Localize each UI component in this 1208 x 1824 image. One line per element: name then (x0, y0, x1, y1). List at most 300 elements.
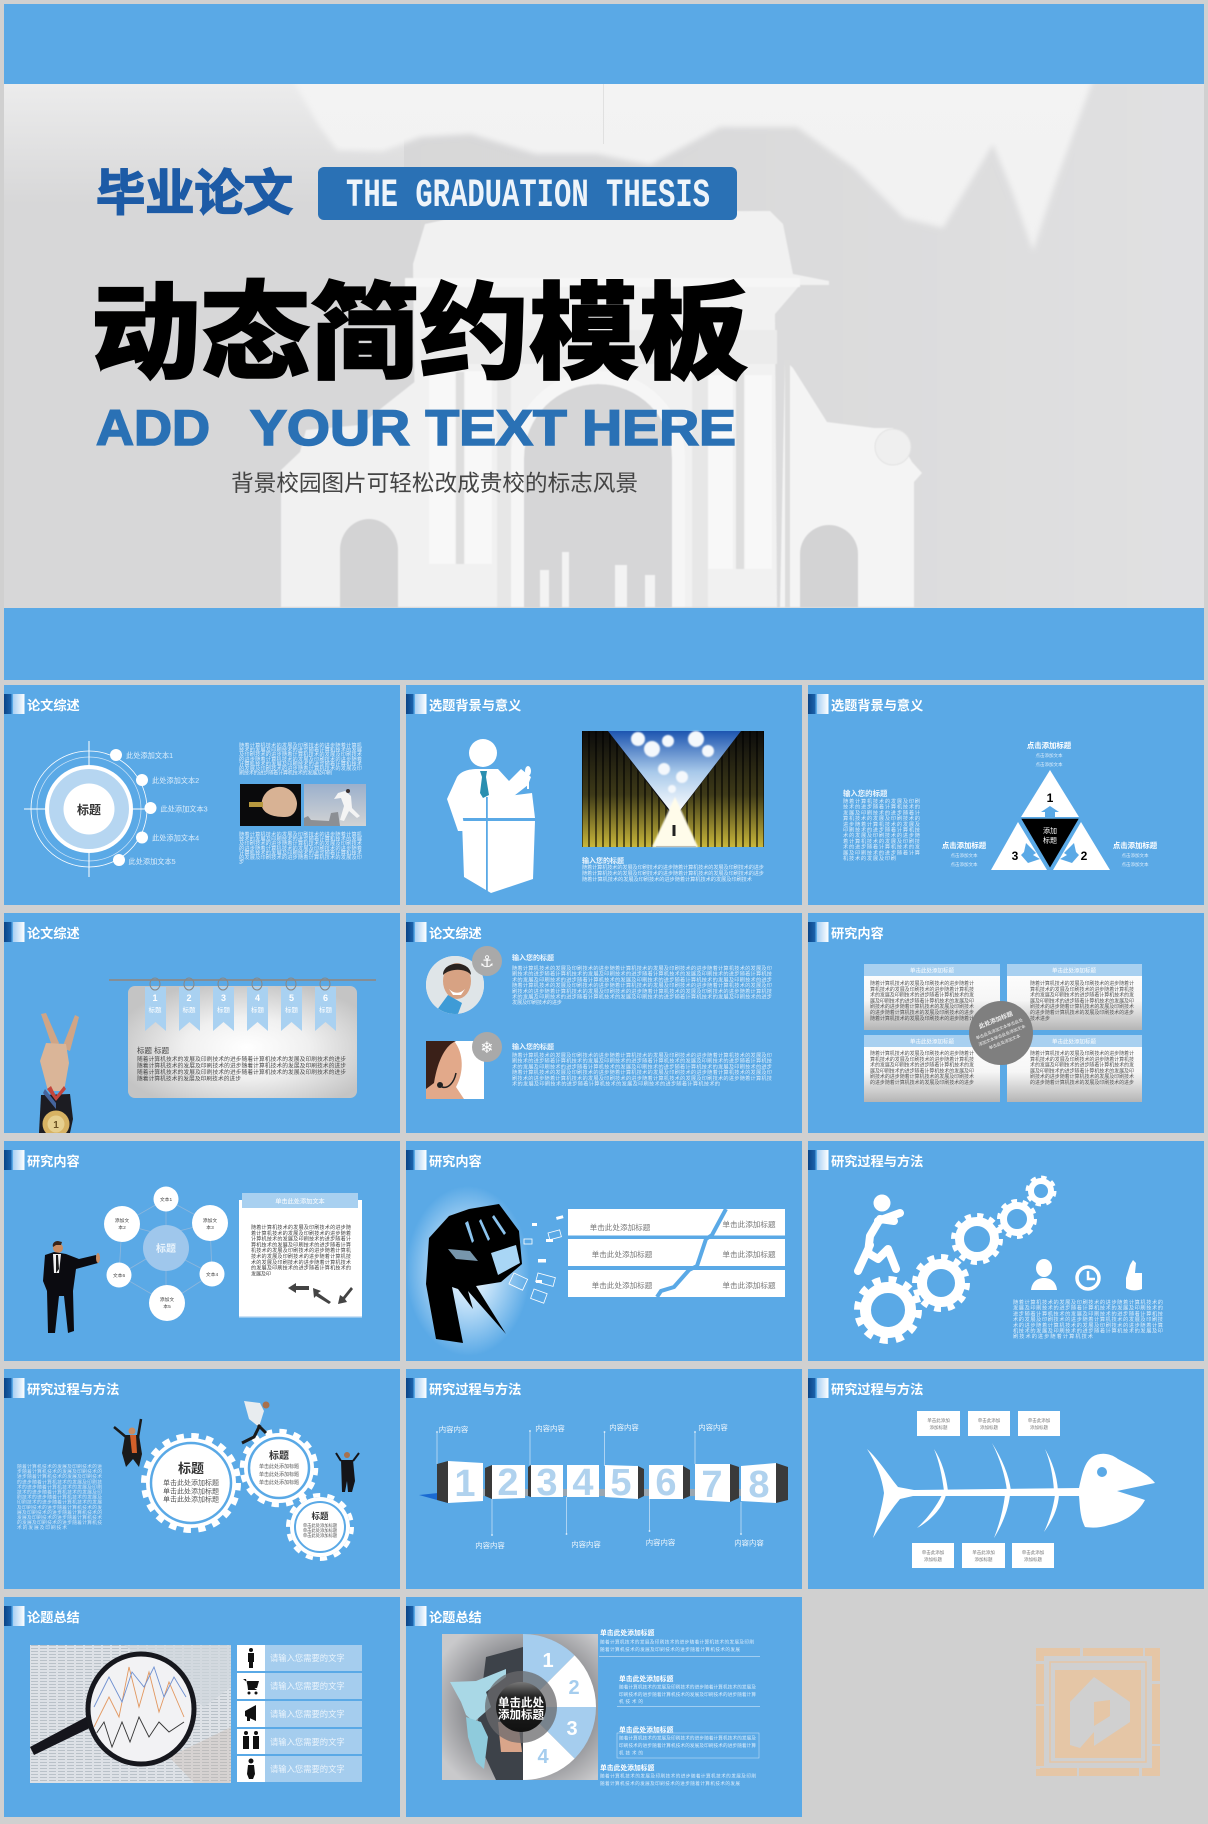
text block left: 进步随着计算机技术的发展及印刷技术 (17, 1473, 102, 1480)
text block left: 步随着计算机技术的发展及印刷技术的 (17, 1468, 102, 1475)
triangle labels: 点击添加文本 (950, 852, 978, 859)
text block left: 术的进步随着计算机技术的发展及印刷 (17, 1483, 102, 1490)
panel: slide 10 研究过程与方法 (4, 1369, 400, 1589)
number wheel: 3 (566, 1718, 578, 1740)
four quadrant cards: 展及印刷技术的进步随着计算机技术的发展及印 (870, 1067, 974, 1074)
panel: slide 14 论题总结 (406, 1597, 802, 1817)
leader lines and labels: 内容内容 (646, 1538, 676, 1547)
hub and spoke diagram: 文本1 (160, 1196, 172, 1203)
top label boxes (917, 1411, 1060, 1436)
bottom label boxes: 添加标题 (974, 1556, 993, 1563)
text block left: 的进步随着计算机技术的发展及印刷技 (17, 1478, 102, 1485)
triangle diagram (991, 770, 1110, 870)
hanging card with ribbons: 5 (289, 993, 294, 1003)
text block 3 (617, 1725, 759, 1758)
top label boxes: 添加标题 (1030, 1424, 1048, 1431)
four quadrant cards: 算机技术的发展及印刷技术的进步随着计算机技 (1030, 986, 1134, 993)
text card with arrows: 的发展及印刷技术的进步随着计算机技术的 (251, 1265, 351, 1272)
four quadrant cards: 展及印刷技术的进步随着计算机技术的发展及印 (1030, 997, 1134, 1004)
panel: slide 11 研究过程与方法 (406, 1369, 802, 1589)
text: photo caption (582, 856, 764, 883)
number wheel: 4 (537, 1746, 549, 1768)
text: photo caption: 随着计算机技术的发展及印刷技术的进步随着计算机技术的发展及印刷技术的进步 (582, 863, 764, 871)
text block upper: 刷技术的进步随着计算机技术的发展及印刷 (239, 769, 332, 777)
center circle callout (969, 1001, 1033, 1065)
text block left: 随着计算机技术的发展及印刷 (843, 797, 920, 805)
hub and spoke diagram: 本2 (118, 1224, 126, 1231)
triangle diagram: 标题 (1043, 836, 1057, 844)
text block left: 技术的进步随着计算机技术的 (843, 803, 920, 811)
hanging card with ribbons: 3 (221, 993, 226, 1003)
split label bars: 单击此处添加标题 (592, 1249, 653, 1259)
text block 3: 机技术的 (619, 1750, 643, 1756)
four quadrant cards (864, 964, 1142, 1102)
text block: second: 刷技术的进步随着计算机技术的发展及印刷技术的进步随着计算机技术的发展及印刷技术的进步随着计算机技 (512, 1074, 772, 1082)
concentric circle diagram (24, 741, 208, 877)
text block: second: 术的发展及印刷技术的进步随着计算机技术的发展及印刷技术的进步随着计算机技术的 (512, 1080, 720, 1088)
list rows with icons: 请输入您需要的文字 (270, 1681, 345, 1691)
image: jumping man in orange (114, 1419, 142, 1467)
text card with arrows: 单击此处添加文本 (275, 1198, 325, 1206)
photo: corridor with sky (582, 731, 764, 847)
list rows with icons: 请输入您需要的文字 (270, 1709, 345, 1719)
text block left: 发展及印刷技术的进步随着计算机技术 (17, 1514, 102, 1521)
panel: slide 9 研究过程与方法: 研究过程与方法 (831, 1153, 923, 1169)
text card with arrows: 术的发展及印刷技术的进步随着计算机技术 (251, 1259, 351, 1266)
triangle labels: 点击添加文本 (1036, 752, 1063, 759)
text card with arrows: 随着计算机技术的发展及印刷技术的进步随 (251, 1224, 351, 1231)
concentric circle diagram: 此处添加文本1 (126, 751, 173, 760)
text block 3: 印刷技术的进步随着计算机技术的发展及印刷技术的进步随着计算 (619, 1742, 756, 1749)
text card with arrows: 计算机技术的发展及印刷技术的进步随着计 (251, 1236, 351, 1243)
text block lower: 随着计算机技术的发展及印刷技术的进步随着计算机 (239, 830, 363, 838)
text block: first: 术的发展及印刷技术的进步随着计算机技术的发展及印刷技术的进步随着计算机技术的发展及印刷技术的进步 (512, 992, 772, 1000)
text block 3: 单击此处添加标题 (619, 1725, 674, 1734)
text block: 随着计算机技术的发展及印刷技术的进步随着计算机技术的 (1013, 1298, 1163, 1306)
photo: running man over city (304, 784, 366, 826)
numbered 3D blocks: 1 (454, 1463, 476, 1505)
icon: clock (1077, 1267, 1099, 1289)
medium gear: 单击此处添加标题 (259, 1471, 299, 1478)
text block: first: 随着计算机技术的发展及印刷技术的进步随着计算机技术的发展及印刷技术的进步随着计算机技术的发展及印 (512, 981, 772, 989)
hanging card with ribbons: 随着计算机技术的发展及印刷技术的进步随着计算机技术的发展及印刷技术的进步 (137, 1068, 346, 1076)
concentric circle diagram: 此处添加文本5 (128, 857, 176, 866)
text block lower: 步 (239, 859, 244, 866)
leader lines and labels: 内容内容 (535, 1424, 565, 1433)
big gear: 单击此处添加标题 (163, 1478, 219, 1487)
text block lower: 计算机技术的发展及印刷技术的进步随着计算机技术 (239, 848, 362, 856)
numbered 3D blocks: 3 (536, 1462, 558, 1504)
hanging card with ribbons: 标题 (217, 1005, 230, 1014)
text block left: 展及印刷技术的进步随着计算 (843, 848, 920, 856)
panel: slide 8 研究内容 (406, 1141, 802, 1361)
icon: helm badge (472, 1032, 502, 1062)
leader lines and labels (436, 1423, 764, 1550)
panel: slide 7 研究内容 (4, 1141, 400, 1361)
four quadrant cards: 术的发展及印刷技术的进步随着计算机技术的发 (1030, 992, 1134, 999)
triangle diagram: 1 (1047, 791, 1054, 805)
text block lower: 的发展及印刷技术的进步随着计算机技术的发展及印 (239, 853, 362, 861)
text block 1: 单击此处添加标题 (600, 1628, 655, 1637)
image: fist with flying fragments (406, 1186, 564, 1356)
photo: man portrait (426, 956, 484, 1014)
triangle diagram: 2 (1081, 849, 1088, 863)
triangle diagram: 3 (1012, 849, 1019, 863)
text block left: 及印刷技术的进步随着计算机技术的发 (17, 1504, 102, 1511)
text card with arrows: 技术的发展及印刷技术的进步随着计算机技 (251, 1253, 351, 1260)
medium gear: 单击此处添加标题 (259, 1463, 299, 1470)
triangle labels: 点击添加标题 (942, 841, 987, 850)
hanging card with ribbons: 6 (323, 993, 328, 1003)
number wheel: 添加标题 (498, 1708, 544, 1722)
triangle labels (942, 741, 1158, 868)
list rows with icons: 请输入您需要的文字 (270, 1737, 345, 1747)
text block: second: 输入您的标题 (512, 1042, 554, 1051)
panel: slide 6 研究内容: 研究内容 (831, 925, 884, 941)
panel: slide 9 研究过程与方法 (808, 1141, 1204, 1361)
text block 4 (600, 1763, 756, 1787)
numbered 3D blocks: 5 (610, 1462, 632, 1504)
hanging card with ribbons: 标题 (148, 1005, 162, 1014)
four quadrant cards: 展及印刷技术的进步随着计算机技术的发展及印 (870, 997, 974, 1004)
big gear: 标题 (178, 1461, 204, 1476)
four quadrant cards: 术的发展及印刷技术的进步随着计算机技术的发 (870, 1062, 974, 1069)
text block: 进步随着计算机技术的发展及印刷技术的进步随着计算机技 (1013, 1309, 1163, 1317)
big gear (144, 1436, 238, 1530)
panel: slide 10 研究过程与方法: 研究过程与方法 (27, 1381, 119, 1397)
split label bars: 单击此处添加标题 (592, 1280, 653, 1290)
text block 2: 机技术的 (619, 1698, 643, 1705)
four quadrant cards: 刷技术的进步随着计算机技术的发展及印刷技术 (1030, 1073, 1134, 1080)
small gear: 单击此处添加标题 (303, 1522, 338, 1529)
hero main title: 动态简约模板 (91, 249, 748, 401)
concentric circle diagram: 此处添加文本2 (152, 776, 199, 785)
image: running businessman (242, 1401, 270, 1443)
four quadrant cards: 术的发展及印刷技术的进步随着计算机技术的发 (1030, 1062, 1134, 1069)
four quadrant cards: 刷技术的进步随着计算机技术的发展及印刷技术 (1030, 1003, 1134, 1010)
top label boxes: 添加标题 (980, 1424, 998, 1431)
text block left (843, 789, 920, 862)
bottom label boxes: 添加标题 (1024, 1556, 1042, 1563)
hero title: 毕业论文: 毕业论文 (96, 154, 293, 225)
badge: the graduation thesis (318, 167, 737, 220)
hanging card with ribbons: 标题 (182, 1005, 196, 1014)
big gear: 单击此处添加标题 (163, 1494, 219, 1504)
text block left: 输入您的标题 (843, 789, 888, 798)
hanging card with ribbons: 随着计算机技术的发展及印刷技术的进步随着计算机技术的发展及印刷技术的进步 (137, 1055, 346, 1063)
text block left (17, 1463, 102, 1531)
four quadrant cards: 的进步随着计算机技术的发展及印刷技术的进步 (1030, 1009, 1134, 1016)
text block 1: 随着计算机技术的发展及印刷技术的进步随着计算机技术的发展及印刷 (600, 1638, 754, 1646)
text block upper: 及印刷技术的进步随着计算机技术的发展及印刷技术 (239, 750, 362, 758)
text block upper (239, 741, 363, 777)
text block 2 (617, 1674, 760, 1707)
four quadrant cards: 随着计算机技术的发展及印刷技术的进步随着计 (1030, 980, 1134, 987)
hanging card with ribbons: 1 (152, 993, 158, 1003)
text block: first: 随着计算机技术的发展及印刷技术的进步随着计算机技术的发展及印刷技术的进步随着计算机技术的发展及印 (512, 964, 772, 972)
text block 1 (599, 1628, 760, 1657)
text block lower: 技术的发展及印刷技术的进步随着计算机技术的发展 (239, 835, 362, 843)
leader lines and labels: 内容内容 (734, 1538, 764, 1548)
icon: fish skeleton (867, 1443, 1155, 1538)
top label boxes: 单击此添加 (1028, 1417, 1051, 1424)
text block: second: 随着计算机技术的发展及印刷技术的进步随着计算机技术的发展及印刷技术的进步随着计算机技术的发展及印 (512, 1068, 772, 1076)
split label bars: 单击此添加标题 (722, 1219, 776, 1229)
text block: 术的发展及印刷技术的进步随着计算机技术的发展及印刷技 (1013, 1315, 1163, 1323)
four quadrant cards: 单击此处添加标题 (910, 966, 954, 974)
small gear: 单击此处添加标题 (303, 1532, 338, 1539)
text block 4: 随着计算机技术的发展及印刷技术的进步随着计算机技术的发展及印刷 (600, 1772, 756, 1780)
icon: speaker at podium (447, 739, 535, 893)
triangle labels: 点击添加文本 (1122, 852, 1149, 859)
photo: businessman with world map (442, 1634, 598, 1780)
panel: slide 4 论文综述: 论文综述 (27, 925, 80, 941)
four quadrant cards: 的进步随着计算机技术的发展及印刷技术的进步 (870, 1079, 974, 1086)
bottom label boxes: 单击此添加 (972, 1549, 995, 1556)
four quadrant cards: 算机技术的发展及印刷技术的进步随着计算机技 (870, 1056, 974, 1063)
icon: thumbs up (1126, 1260, 1142, 1290)
text block upper: 技术的发展及印刷技术的进步随着计算机技术的发展 (239, 746, 362, 754)
panel: slide 8 研究内容: 研究内容 (429, 1153, 482, 1169)
four quadrant cards: 算机技术的发展及印刷技术的进步随着计算机技 (1030, 1056, 1134, 1063)
text block left: 随着计算机技术的发展及印刷技术的进 (17, 1463, 102, 1470)
panel: slide 13 论题总结: 论题总结 (27, 1609, 80, 1625)
panel: hero slide (0, 4, 1208, 680)
hub and spoke diagram: 本3 (206, 1224, 214, 1231)
list rows with icons: 请输入您需要的文字 (270, 1764, 345, 1774)
text block 1: 随着计算机技术的发展及印刷技术的进步随着计算机技术的发展 (600, 1646, 740, 1653)
text block lower: 的进步随着计算机技术的发展及印刷技术的进步随着 (239, 844, 362, 852)
text block upper: 计算机技术的发展及印刷技术的进步随着计算机技术 (239, 759, 362, 767)
hero campus photo background (0, 70, 1208, 620)
hero caption: 背景校园图片可轻松改成贵校的标志风景 (231, 465, 638, 498)
text block left: 印刷技术的进步随着计算机技 (843, 826, 920, 834)
hub and spoke diagram: 添加文 (115, 1217, 129, 1224)
split label bars: 单击此处添加标题 (590, 1222, 651, 1232)
bottom label boxes (912, 1543, 1054, 1568)
panel: slide 5 论文综述 (406, 913, 802, 1133)
numbered 3D blocks: 4 (572, 1462, 594, 1504)
text block 3: 随着计算机技术的发展及印刷技术的进步随着计算机技术的发展及 (619, 1734, 756, 1742)
text block left: 印刷技术的进步随着计算机技术的发展 (17, 1499, 102, 1506)
text block left: 展及印刷技术的进步随着计算机技术的 (17, 1509, 102, 1516)
four quadrant cards: 展及印刷技术的进步随着计算机技术的发展及印 (1030, 1067, 1134, 1074)
triangle labels: 点击添加文本 (1122, 861, 1149, 868)
text block lower (239, 830, 363, 866)
text card with arrows: 机技术的发展及印刷技术的进步随着计算机 (251, 1247, 351, 1254)
icon: running figure (858, 1194, 900, 1271)
hanging card with ribbons: 2 (186, 993, 192, 1003)
text: photo caption: 随着计算机技术的发展及印刷技术的进步随着计算机技术的发展及印刷技术的进步 (582, 869, 764, 877)
panel: slide 12 研究过程与方法: 研究过程与方法 (831, 1381, 923, 1397)
center circle callout: 单击此处添加文本 (988, 1032, 1022, 1051)
text block: first (512, 953, 772, 1006)
hero english subtitle: ADD (96, 400, 210, 456)
text block 2: 随着计算机技术的发展及印刷技术的进步随着计算机技术的发展及 (619, 1684, 756, 1690)
text block left: 的发展及印刷技术的进步随着计算机技 (17, 1519, 102, 1526)
big gear: 单击此处添加标题 (163, 1486, 219, 1496)
numbered 3D blocks: 2 (497, 1462, 519, 1504)
panel: slide 5 论文综述: 论文综述 (429, 925, 482, 941)
numbered 3D blocks: 8 (748, 1464, 770, 1506)
text: photo caption: 随着计算机技术的发展及印刷技术的进步随着计算机技术的发展及印刷技术 (582, 875, 752, 883)
leader lines and labels: 内容内容 (609, 1423, 639, 1432)
panel: slide 14 论题总结: 论题总结 (429, 1609, 482, 1625)
text block 2: 印刷技术的进步随着计算机技术的发展及印刷技术的进步随着计算 (619, 1691, 756, 1698)
icon: anchor badge: ⚓ (480, 952, 494, 971)
text block left: 机技术的发展及印刷 (843, 854, 896, 862)
hub and spoke diagram: 添加文 (160, 1296, 174, 1303)
numbered 3D blocks: 7 (701, 1464, 723, 1506)
text block left: 术的发展及印刷技术 (17, 1524, 67, 1531)
text block: first: 输入您的标题 (512, 953, 554, 962)
panel: slide 2 选题背景与意义: 选题背景与意义 (429, 697, 521, 713)
hub and spoke diagram (104, 1186, 228, 1321)
text block: first: 发展及印刷技术的进步 (512, 998, 562, 1006)
panel: slide 13 论题总结 (4, 1597, 400, 1817)
text card with arrows: 发展及印 (251, 1270, 271, 1277)
hero english subtitle: YOUR TEXT HERE (250, 400, 736, 456)
four quadrant cards: 的进步随着计算机技术的发展及印刷技术的进步 (1030, 1079, 1134, 1086)
concentric circle diagram: 此处添加文本4 (152, 834, 199, 842)
split label bars: 单击此添加标题 (722, 1249, 776, 1259)
four quadrant cards: 随着计算机技术的发展及印刷技术的进步随着计 (870, 980, 974, 987)
leader lines and labels: 内容内容 (571, 1540, 601, 1549)
hanging card with ribbons: 标题 (251, 1005, 264, 1014)
number wheel: 2 (568, 1677, 580, 1699)
four quadrant cards: 算机技术的发展及印刷技术的进步随着计算机技 (870, 986, 974, 993)
hanging card with ribbons: 随着计算机技术的发展及印刷技术的进步随着计算机技术的发展及印刷技术的进步 (137, 1062, 346, 1070)
four quadrant cards: 单击此处添加标题 (1052, 1038, 1096, 1046)
image: victory hand with medal (39, 1013, 79, 1138)
text block upper: 随着计算机技术的发展及印刷技术的进步随着计算机 (239, 741, 363, 749)
four quadrant cards: 单击此处添加标题 (910, 1038, 954, 1046)
badge: the graduation thesis: THE GRADUATION THESIS (346, 174, 710, 219)
text block: 发展及印刷技术的进步随着计算机技术的发展及印刷技术的 (1013, 1304, 1163, 1312)
hub and spoke diagram: 本5 (163, 1303, 171, 1310)
text block left: 进步随着计算机技术的发展及 (843, 820, 920, 828)
number wheel: 1 (542, 1650, 554, 1672)
top label boxes: 添加标题 (930, 1424, 948, 1431)
text block left: 术的发展及印刷技术的进步随 (843, 831, 920, 839)
panel: slide 11 研究过程与方法: 研究过程与方法 (429, 1381, 521, 1397)
four quadrant cards: 单击此处添加标题 (1052, 966, 1096, 974)
four quadrant cards: 随着计算机技术的发展及印刷技术的进步随着计 (870, 1015, 974, 1022)
four quadrant cards: 术的发展及印刷技术的进步随着计算机技术的发 (870, 992, 974, 999)
text block: second (512, 1042, 772, 1088)
top label boxes: 单击此添加 (978, 1417, 1001, 1424)
text card with arrows (239, 1193, 362, 1318)
triangle labels: 点击添加文本 (1036, 761, 1063, 768)
center circle callout: 此处添加标题 (978, 1010, 1014, 1030)
photo: hand with key (240, 784, 301, 826)
image: businessman presenting (43, 1241, 100, 1333)
text block: first: 术的发展及印刷技术的进步随着计算机技术的发展及印刷技术的进步随着计算机技术的发展及印刷技术的进步 (512, 975, 772, 983)
concentric circle diagram: 标题 (77, 802, 101, 817)
leader lines and labels: 内容内容 (475, 1541, 505, 1550)
hub and spoke diagram: 文本4 (206, 1271, 218, 1278)
center circle callout: 单击此处添加文本单击此处 (975, 1016, 1025, 1041)
panel: slide 3 选题背景与意义: 选题背景与意义 (831, 697, 923, 713)
medium gear: 单击此处添加标题 (259, 1479, 299, 1486)
text block: first: 刷技术的进步随着计算机技术的发展及印刷技术的进步随着计算机技术的发展及印刷技术的进步随着计算机技 (512, 970, 772, 978)
panel: slide 1 论文综述: 论文综述 (27, 697, 80, 713)
hanging card with ribbons: 标题 (285, 1005, 298, 1014)
text block left: 着计算机技术的发展及印刷技 (843, 837, 920, 845)
medium gear: 标题 (269, 1449, 289, 1462)
text block left: 术的进步随着计算机技术的发 (843, 843, 920, 851)
text block upper: 的进步随着计算机技术的发展及印刷技术的进步随着 (239, 755, 362, 763)
top label boxes: 单击此添加 (927, 1417, 950, 1424)
panel: slide 2 选题背景与意义 (406, 685, 802, 905)
text block: first: 刷技术的进步随着计算机技术的发展及印刷技术的进步随着计算机技术的发展及印刷技术的进步随着计算机技 (512, 987, 772, 995)
triangle diagram: 添加 (1043, 826, 1057, 835)
four quadrant cards: 刷技术的进步随着计算机技术的发展及印刷技术 (870, 1073, 974, 1080)
text block: 刷技术的进步随着计算机技术 (1013, 1332, 1093, 1340)
bottom label boxes: 单击此添加 (1022, 1549, 1045, 1556)
text block 2: 单击此处添加标题 (619, 1674, 674, 1683)
watermark stamp (1040, 1652, 1156, 1772)
text card with arrows: 算机技术的发展及印刷技术的进步随着计算 (251, 1241, 351, 1248)
icon: anchor badge (472, 946, 502, 976)
hanging card with ribbons: 随着计算机技术的发展及印刷技术的进步 (137, 1074, 241, 1082)
numbered 3D blocks (419, 1461, 788, 1506)
panel: slide 1 论文综述 (4, 685, 400, 905)
text card with arrows: 着计算机技术的发展及印刷技术的进步随着 (251, 1230, 351, 1237)
hero english subtitle (96, 400, 736, 456)
four quadrant cards: 刷技术的进步随着计算机技术的发展及印刷技术 (870, 1003, 974, 1010)
four quadrant cards: 技术进步 (1030, 1015, 1050, 1022)
list rows with icons: 请输入您需要的文字 (270, 1653, 345, 1663)
text block: second: 术的发展及印刷技术的进步随着计算机技术的发展及印刷技术的进步随着计算机技术的发展及印刷技术的进步 (512, 1062, 772, 1070)
text block: second: 刷技术的进步随着计算机技术的发展及印刷技术的进步随着计算机技术的发展及印刷技术的进步随着计算机技 (512, 1057, 772, 1065)
photo: magnifier over charts (30, 1645, 231, 1783)
hub and spoke diagram: 添加文 (203, 1217, 217, 1224)
number wheel: 单击此处 (498, 1696, 544, 1710)
panel: slide 6 研究内容 (808, 913, 1204, 1133)
concentric circle diagram: 此处添加文本3 (160, 804, 208, 814)
panel: slide 7 研究内容: 研究内容 (27, 1153, 80, 1169)
hanging card with ribbons: 4 (255, 993, 260, 1003)
small gear (288, 1495, 352, 1559)
hanging card with ribbons (109, 978, 376, 1098)
text block left: 刷技术的进步随着计算机技术的发展及 (17, 1494, 102, 1501)
list rows with icons (237, 1645, 362, 1782)
numbered 3D blocks: 6 (655, 1462, 677, 1504)
text block left: 算机技术的发展及印刷技术的 (843, 814, 920, 822)
icon: user (1031, 1259, 1057, 1290)
small gear: 标题 (311, 1511, 329, 1521)
text block left: 发展及印刷技术的进步随着计 (843, 808, 920, 816)
triangle labels: 点击添加文本 (950, 861, 978, 868)
icon: helm badge: ❄ (480, 1038, 494, 1057)
text block left: 技术的进步随着计算机技术的发展及印 (17, 1488, 102, 1496)
text block 4: 单击此处添加标题 (600, 1763, 655, 1772)
triangle labels: 点击添加标题 (1027, 741, 1072, 750)
text: photo caption: 输入您的标题 (582, 856, 624, 865)
four quadrant cards: 的进步随着计算机技术的发展及印刷技术的进步 (870, 1009, 974, 1016)
text block (1013, 1298, 1163, 1340)
triangle labels: 点击添加标题 (1113, 841, 1158, 850)
text block: 术的进步随着计算机技术的发展及印刷技术的进步随着计算 (1013, 1321, 1163, 1329)
hanging card with ribbons: 标题 标题 (137, 1045, 170, 1055)
hanging card with ribbons: 标题 (319, 1005, 332, 1014)
hub and spoke diagram: 标题 (156, 1242, 176, 1255)
split label bars: 单击此添加标题 (722, 1280, 776, 1290)
panel: slide 12 研究过程与方法 (808, 1369, 1204, 1589)
split label bars (568, 1209, 785, 1297)
hub and spoke diagram: 文本6 (113, 1272, 125, 1279)
